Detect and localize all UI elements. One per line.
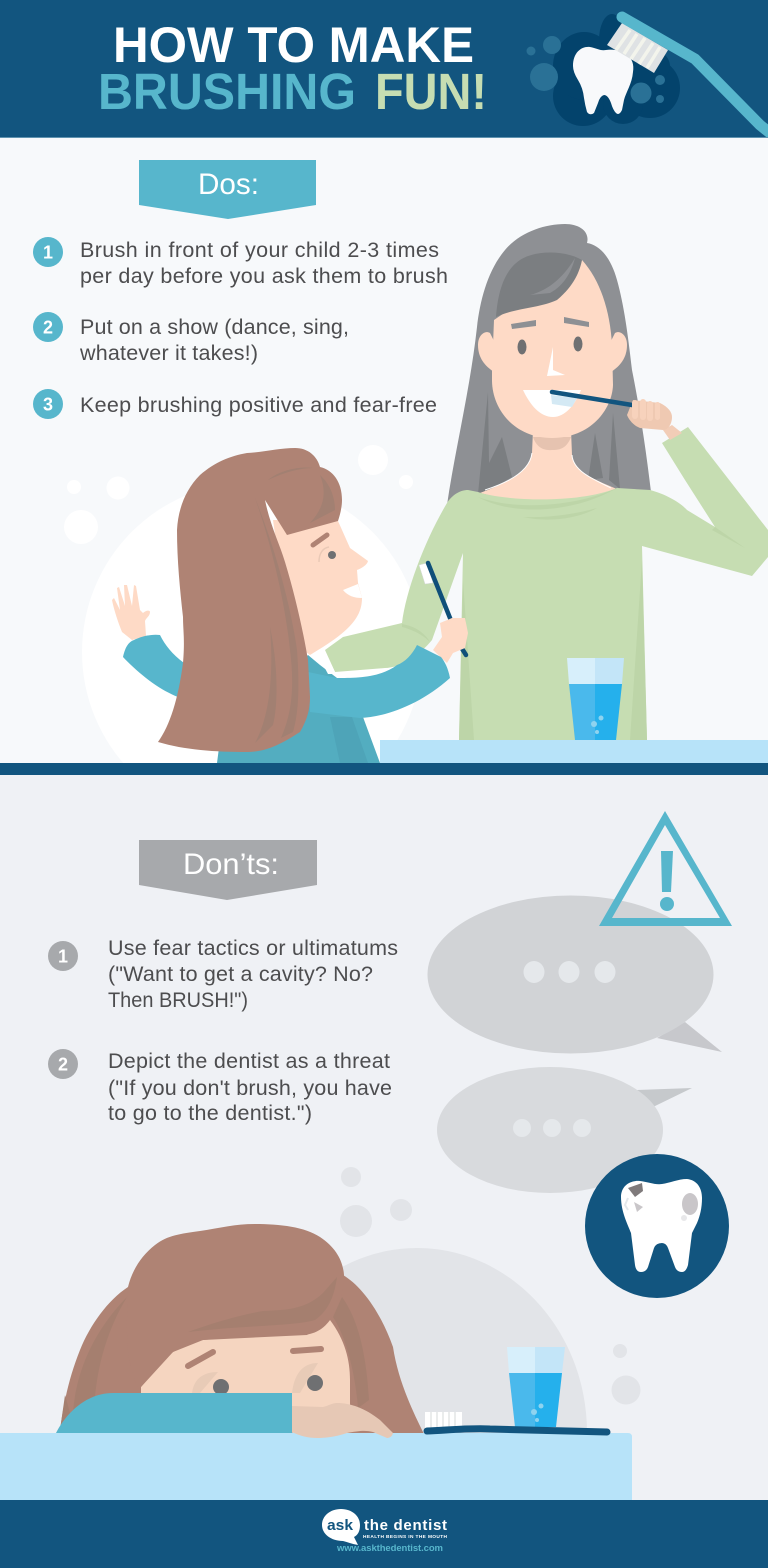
title: BRUSHING — [98, 63, 356, 120]
nose — [547, 347, 565, 376]
panel: don'ts — [0, 811, 732, 1500]
panel: dos — [33, 160, 768, 822]
speech bubble 1 — [428, 896, 722, 1054]
divider band — [0, 763, 768, 775]
title: FUN! — [375, 63, 487, 120]
raised hand with toothbrush — [551, 392, 682, 440]
icon: toothbrush on counter — [425, 1412, 607, 1432]
hair — [158, 448, 342, 752]
heading: Don'ts — [139, 840, 317, 900]
countertop — [380, 740, 768, 763]
decorative bubbles — [64, 445, 413, 544]
brows — [511, 320, 536, 329]
illustration: reluctant child — [56, 1224, 424, 1434]
heading: Dos: Dos: — [198, 168, 259, 201]
title: HOW TO MAKE — [113, 17, 474, 73]
item 3: 3 — [43, 394, 53, 414]
item 2: whatever it takes!) — [79, 341, 258, 365]
logo: the dentist — [364, 1517, 447, 1534]
item 1 — [48, 936, 398, 1012]
item 2: 2 — [58, 1054, 68, 1074]
neck — [480, 430, 617, 510]
collar — [325, 666, 335, 674]
fringe — [496, 252, 582, 317]
item 2 — [48, 1049, 392, 1125]
item 1: per day before you ask them to brush — [80, 264, 448, 288]
illustration: woman brushing teeth — [325, 224, 768, 740]
eyes — [518, 340, 526, 354]
background circle behind sad child — [247, 1248, 587, 1433]
item 2: Depict the dentist as a threat — [108, 1049, 390, 1073]
brows — [188, 1352, 213, 1366]
icon: glass of water — [567, 658, 624, 740]
speech bubble 2 — [437, 1067, 692, 1193]
shirt body — [217, 655, 380, 763]
left sleeve — [123, 635, 184, 697]
item 2: to go to the dentist.") — [108, 1101, 312, 1125]
back hair — [60, 1275, 424, 1434]
item 2 — [33, 312, 349, 365]
shirt — [325, 427, 768, 740]
eye, brow and smile — [313, 535, 362, 598]
icon: warning triangle — [599, 811, 732, 926]
hand resting on counter — [292, 1403, 393, 1438]
item 1: Use fear tactics or ultimatums — [108, 936, 398, 960]
icon: tooth being brushed — [526, 14, 768, 137]
item 1: Then BRUSH!") — [108, 988, 248, 1012]
icon: glass of water — [507, 1347, 565, 1427]
icon: tooth with cavities — [585, 1154, 729, 1298]
countertop — [0, 1433, 632, 1500]
face — [273, 520, 368, 655]
header banner — [0, 0, 768, 138]
face — [492, 260, 613, 438]
item 1: Brush in front of your child 2-3 times — [80, 238, 439, 262]
logo: www.askthedentist.com — [336, 1543, 443, 1554]
face — [141, 1320, 350, 1433]
illustration: child brushing — [112, 448, 468, 763]
arm — [56, 1393, 292, 1433]
logo: HEALTH BEGINS IN THE MOUTH — [363, 1534, 448, 1540]
item 1: 1 — [43, 242, 53, 262]
ears — [478, 332, 496, 372]
logo: ask — [327, 1517, 354, 1534]
left hand — [112, 585, 150, 640]
heading: Dos — [139, 160, 316, 219]
heading: Don'ts: Don’ts: — [183, 848, 279, 881]
item 2: ("If you don't brush, you have — [108, 1076, 392, 1100]
top hair — [127, 1224, 344, 1393]
eyes — [192, 1363, 323, 1395]
footer — [0, 1500, 768, 1568]
hair — [447, 224, 651, 505]
list: dos items — [33, 237, 448, 419]
right sleeve — [308, 645, 450, 718]
item 2: 2 — [43, 318, 53, 338]
item 1: 1 — [58, 946, 68, 966]
item 1: ("Want to get a cavity? No? — [108, 962, 373, 986]
inner hair shade — [333, 1297, 369, 1408]
mouth — [523, 390, 581, 417]
background circle behind child — [82, 482, 422, 822]
right hand with toothbrush — [419, 563, 468, 663]
logo — [322, 1509, 448, 1554]
item 3: Keep brushing positive and fear-free — [80, 393, 437, 417]
item 1 — [33, 237, 448, 288]
decorative bubbles — [340, 1167, 640, 1404]
item 2: Put on a show (dance, sing, — [80, 315, 349, 339]
list: don'ts items — [48, 936, 398, 1125]
title — [98, 17, 487, 120]
